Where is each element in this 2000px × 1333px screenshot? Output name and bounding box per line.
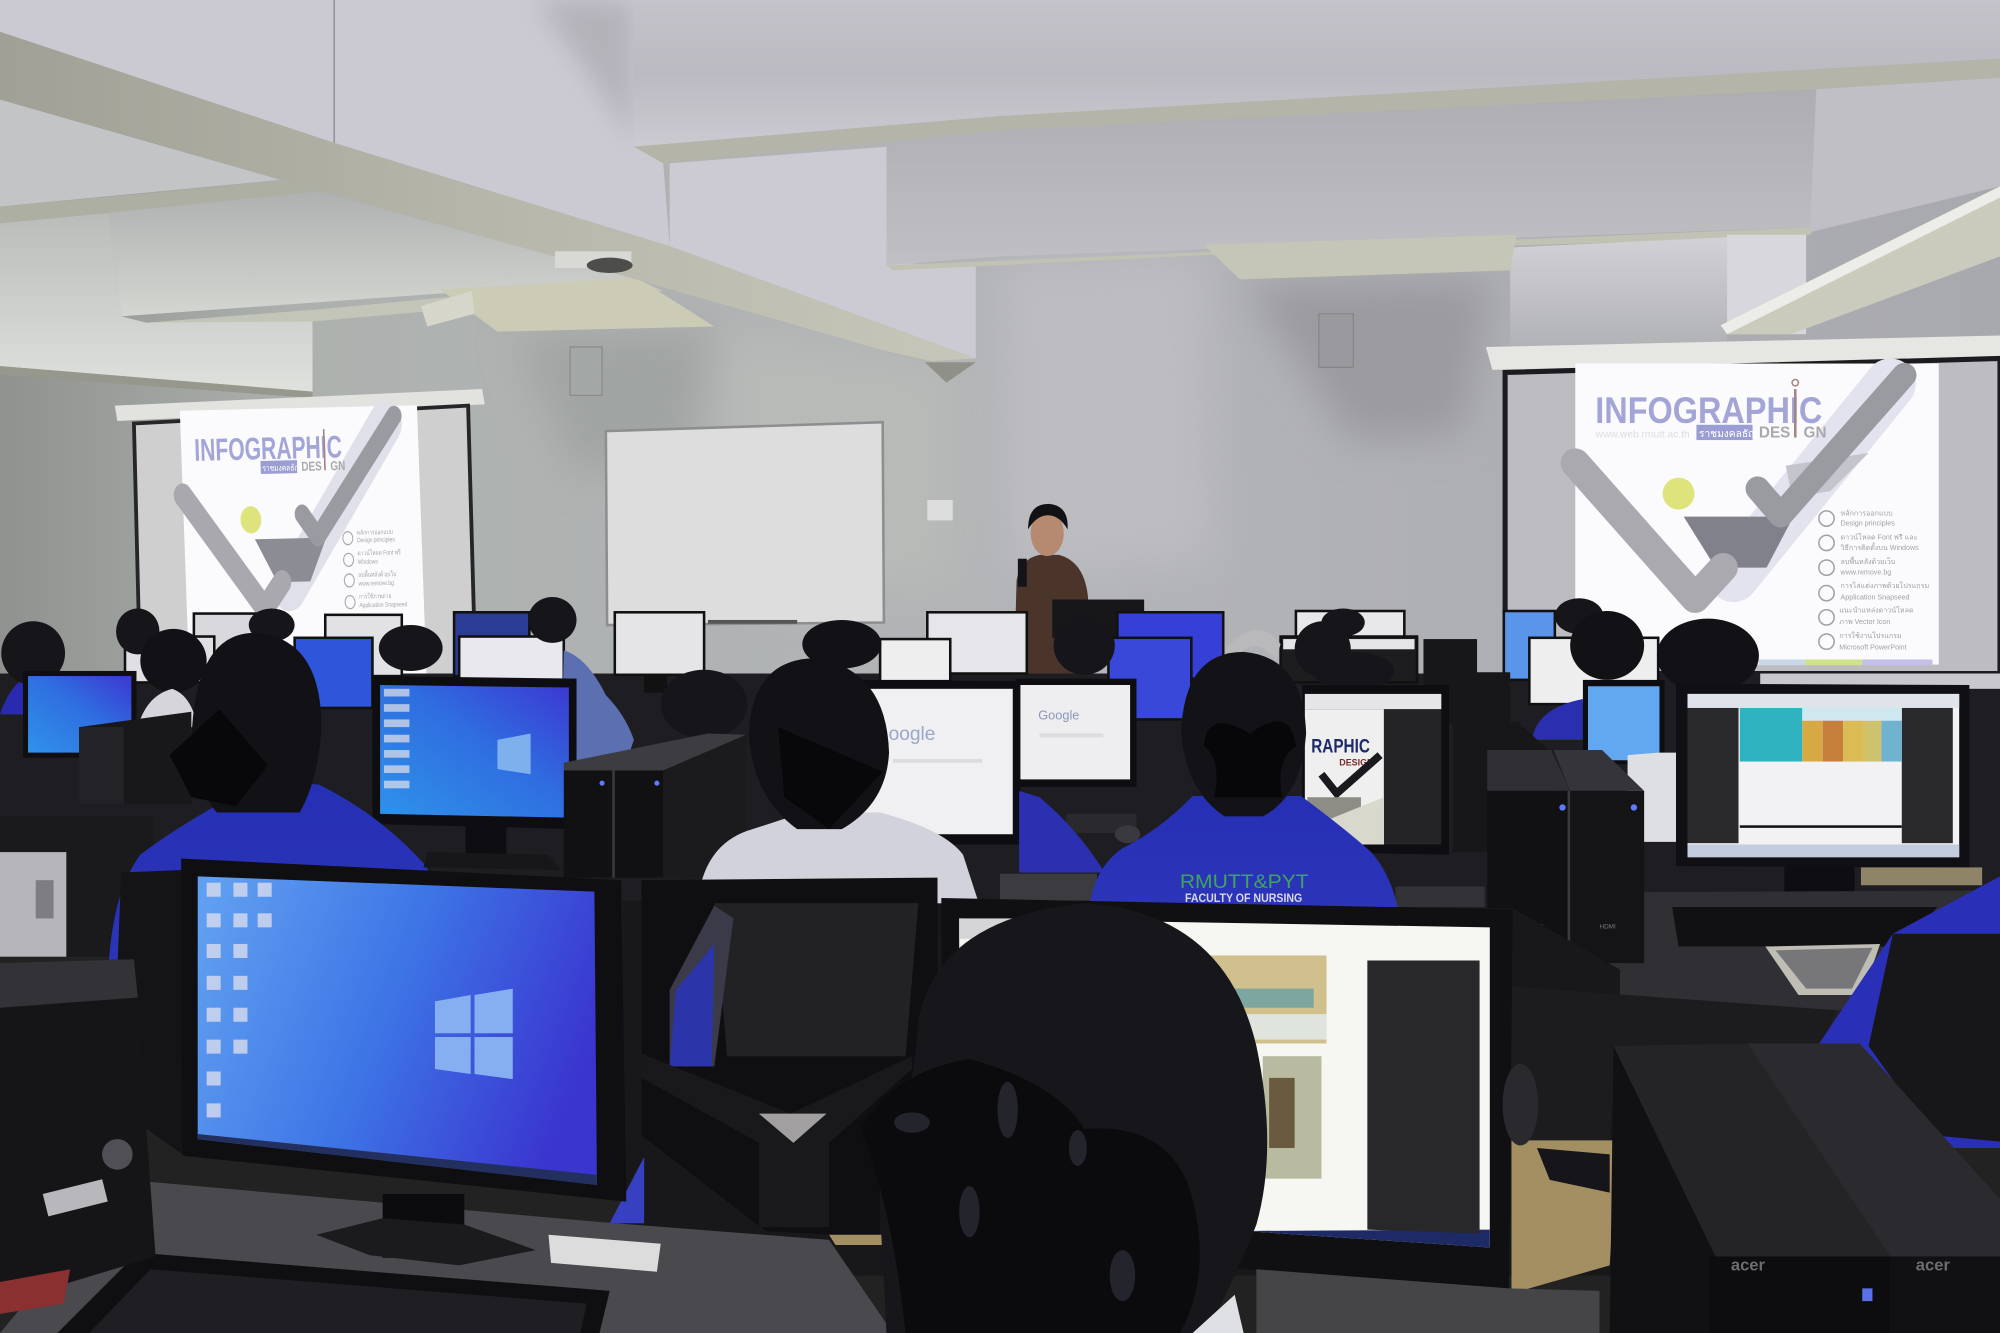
AC unit centre (1204, 235, 1517, 279)
keyboard and mouse (1066, 814, 1140, 843)
lit patch below the diagonal beam (0, 99, 281, 207)
left slide: Design principles (357, 537, 395, 545)
left slide: ราชมงคลธัญบุรี (262, 462, 308, 473)
right slide: DES (1759, 425, 1790, 442)
left slide: หลักการออกแบบ (357, 528, 393, 537)
middle face (670, 147, 976, 358)
slide checklist: ภาพ Vector Icon (1839, 618, 1890, 626)
student right edge (1818, 876, 2000, 1148)
left column (0, 213, 312, 392)
monitor: infographic slide (1302, 685, 1449, 855)
front student (861, 903, 1267, 1333)
monitor: google right (1015, 679, 1136, 787)
right slide (1575, 364, 1939, 665)
monitor: infographic slide: RAPHIC (1311, 737, 1370, 758)
chair bracket (642, 1054, 912, 1227)
student behind, left of the jacket student (1019, 791, 1105, 873)
slide checklist: Design principles (1841, 520, 1895, 528)
front-right monitor (941, 898, 1599, 1333)
left slide: www.remove.bg (358, 580, 394, 588)
jacket lettering: RMUTT&PYT (1180, 872, 1309, 893)
brand labels: acer (1731, 1255, 1766, 1274)
keyboard (1672, 907, 1938, 946)
taskbar (198, 1134, 597, 1185)
back row students (0, 597, 1759, 765)
left slide: INFOGRAPHIC (194, 429, 342, 468)
slide checklist: ลบพื้นหลังด้วยเว็บ (1841, 556, 1895, 566)
AC unit left (440, 278, 714, 332)
back row dark furniture band (0, 674, 2000, 903)
slide checklist: แนะนำแหล่งดาวน์โหลด (1839, 605, 1914, 614)
desktop icons (207, 883, 272, 1117)
left slide: GN (330, 460, 346, 474)
left bright face (0, 0, 670, 246)
lecturer (1014, 504, 1088, 676)
back wall (0, 0, 2000, 791)
monitor: windows desktop (372, 676, 577, 855)
front-right PC towers (1610, 1043, 2000, 1333)
left slide: Windows (358, 559, 378, 566)
area under desks (622, 901, 1837, 1293)
left lower face (108, 191, 638, 316)
right projector screen (1486, 335, 2000, 674)
left projector screen (115, 389, 485, 682)
monitor: google left (857, 680, 1020, 844)
slide checklist: วิธีการติดตั้งบน Windows (1841, 542, 1919, 552)
front desk surface (0, 1180, 893, 1333)
whiteboard (606, 422, 884, 625)
chair behind front-left monitor (117, 870, 182, 1154)
olive strip (0, 181, 332, 223)
screen (959, 918, 1490, 1248)
front keyboard (57, 1253, 610, 1333)
slide title: INFOGRAPHIC (1595, 390, 1822, 431)
student left (108, 633, 434, 969)
front-left tower (0, 959, 156, 1314)
slide checklist: ดาวน์โหลด Font ฟรี และ (1841, 533, 1918, 542)
monitor: infographic slide: DESIGN (1339, 757, 1373, 767)
printer left edge (0, 852, 66, 957)
back-row tower (1453, 722, 1551, 852)
diagonal duct (1721, 186, 2000, 334)
speakers (570, 347, 602, 395)
front-right PC towers: acer (1916, 1255, 1950, 1274)
monitor: far-left windows (23, 671, 136, 758)
monitor: right web page (1676, 684, 1969, 907)
tower: far-left (79, 712, 191, 804)
left slide (180, 405, 427, 682)
windows logo (435, 989, 513, 1079)
slide checklist: www.remove.bg (1840, 569, 1891, 577)
front chair (610, 878, 938, 1237)
monitor: google right: Google (1038, 707, 1079, 722)
lit column right (1727, 235, 1806, 334)
left slide: Application Snapseed (359, 602, 407, 610)
left slide: DES (301, 460, 322, 474)
web thumbnail top (1205, 955, 1327, 1043)
slide checklist: Microsoft PowerPoint (1839, 643, 1907, 651)
student white shirt (699, 658, 980, 906)
stand (383, 1194, 464, 1258)
diagonal beam underside (0, 32, 976, 361)
chair silver tip (759, 1114, 827, 1143)
PC tower pair: centre (564, 733, 746, 878)
slide checklist: Application Snapseed (1841, 594, 1910, 602)
left slide: ดาวน์โหลด Font ฟรี (357, 548, 401, 558)
desk below monitor (1256, 1269, 1599, 1333)
student jacket with text: FACULTY OF NURSING (1185, 891, 1302, 905)
student jacket with text (1089, 652, 1398, 908)
mid-level desks (0, 816, 2000, 1010)
left slide: การใช้ภาพถ่าย (359, 591, 391, 601)
monitor: windows small right (1583, 680, 1676, 842)
PC tower pair: right (1487, 750, 1644, 963)
web thumbnail bottom (1263, 1056, 1321, 1179)
screen: windows desktop (198, 876, 597, 1185)
middle row monitors (23, 671, 1969, 907)
keyboard behind student (423, 852, 561, 870)
bow highlights (894, 1082, 1135, 1301)
right desk items (1672, 907, 1938, 995)
paper on desk (548, 1235, 661, 1272)
ceiling and beams (0, 0, 2000, 398)
back row monitors (125, 600, 1658, 723)
front-left monitor (181, 858, 626, 1265)
slide checklist: การใช้งานโปรแกรม (1839, 631, 1902, 640)
right face (1810, 78, 2000, 232)
PC tower pair: right: HDMI (1527, 924, 1543, 931)
PC tower pair: right: HDMI (1599, 924, 1616, 931)
slide checklist (1819, 509, 1929, 651)
right slide: www.web.rmutt.ac.th (1595, 430, 1690, 441)
upper beam (634, 0, 2000, 147)
sprinkler (555, 251, 631, 268)
tablet (1765, 944, 1880, 995)
right slide: ราชมงคลธัญบุรี (1699, 428, 1769, 440)
left slide: ลบพื้นหลังด้วยเว็บ (358, 568, 397, 579)
slide checklist: การไล่แต่งภาพด้วยโปรแกรม (1841, 581, 1929, 590)
slide checklist: หลักการออกแบบ (1841, 509, 1893, 517)
monitor: google left: Google (874, 724, 935, 745)
wall light and shadow (517, 255, 1491, 600)
right slide: GN (1804, 425, 1827, 442)
